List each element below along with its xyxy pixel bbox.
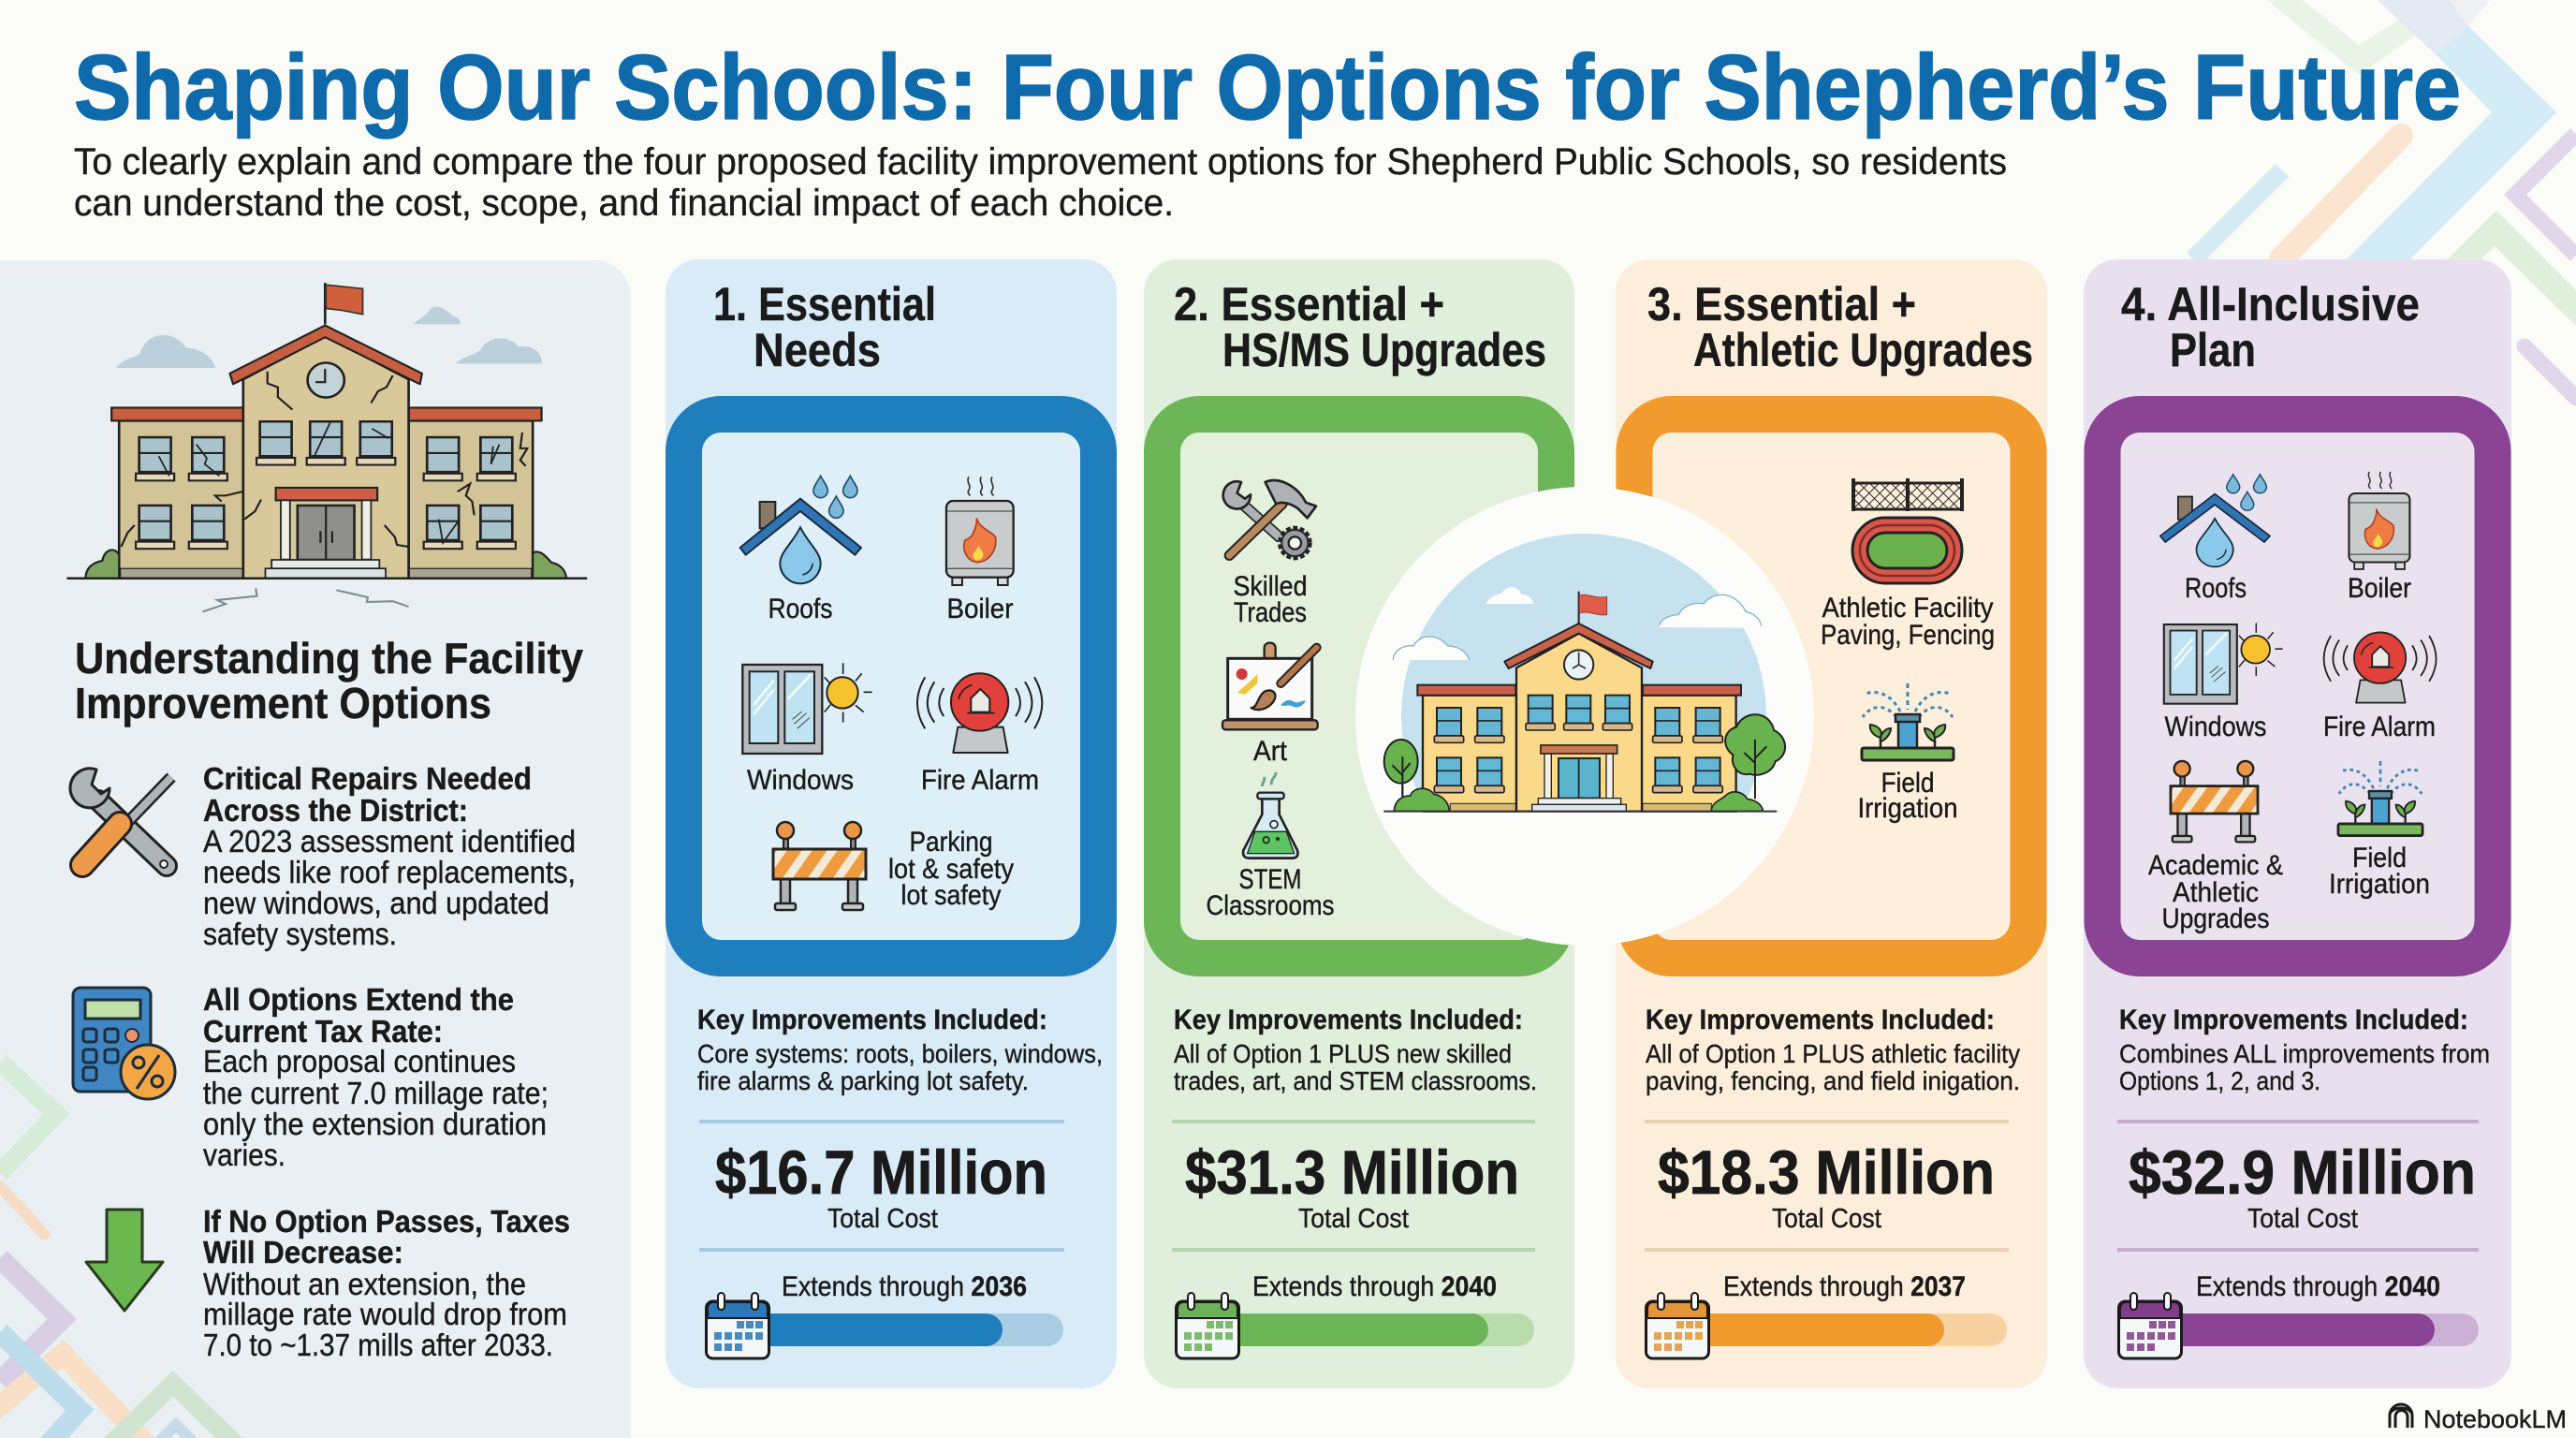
icon: green down arrow	[86, 1210, 163, 1311]
timeline: option 1 extends through 2036: Extends through 2036	[782, 1271, 1027, 1302]
cost: option 3: $18.3 Million	[1658, 1137, 1995, 1207]
frame: option 3 improvements	[1634, 414, 2028, 959]
timeline: option 4 extends through 2040: Extends through 2040	[2196, 1271, 2440, 1302]
heading: option 4: 4. All-Inclusive	[2121, 278, 2420, 330]
label: field irrigation: Field	[1881, 768, 1934, 799]
label: stem classrooms: STEM	[1239, 864, 1301, 895]
text: if no option passes	[203, 1204, 570, 1362]
label: academic and athletic upgrades	[2148, 850, 2283, 934]
cost: option 2: $31.3 Million	[1185, 1137, 1519, 1207]
heading: option 1	[713, 278, 936, 376]
label: athletic facility: Paving, Fencing	[1821, 620, 1995, 651]
label: boiler: Boiler	[947, 594, 1014, 624]
label: stem classrooms	[1206, 864, 1335, 921]
cost: option 3: Total Cost	[1772, 1204, 1881, 1234]
text: all options extend: the current 7.0 millage rate;	[203, 1076, 549, 1110]
text: key improvements option 3: Key Improvements Included:	[1646, 1005, 1995, 1035]
subtitle	[74, 141, 2007, 224]
timeline: option 2 extends through 2040: Extends through 2040	[1252, 1271, 1497, 1302]
text: all options extend: Current Tax Rate:	[203, 1014, 443, 1049]
label: stem classrooms: Classrooms	[1206, 890, 1335, 921]
illustration: damaged school	[66, 283, 587, 612]
text: critical repairs: Across the District:	[203, 793, 468, 828]
text: key improvements option 3: All of Option 1 PLUS athletic facility	[1646, 1039, 2020, 1068]
subtitle: To clearly explain and compare the four proposed facility improvement options for Shepherd Public Schools, so residents	[74, 141, 2007, 183]
label: field irrigation	[1857, 768, 1958, 824]
label: field irrigation	[2329, 843, 2430, 900]
text: key improvements option 3	[1646, 1005, 2020, 1095]
text: key improvements option 2: trades, art, and STEM classrooms.	[1174, 1066, 1537, 1095]
text: key improvements option 2	[1174, 1005, 1537, 1095]
text: critical repairs: needs like roof replacements,	[203, 855, 576, 889]
text: critical repairs: safety systems.	[203, 917, 397, 951]
icon: windows	[2164, 624, 2283, 704]
cost: option 2: Total Cost	[1298, 1204, 1409, 1234]
text: if no option passes: Will Decrease:	[203, 1235, 403, 1269]
panel: option 2 essential + HS/MS upgrades	[1144, 259, 1574, 1388]
cost: option 2	[1185, 1137, 1519, 1234]
label: art: Art	[1253, 736, 1288, 767]
icon: fire alarm	[2324, 632, 2437, 703]
cost: option 4: $32.9 Million	[2129, 1137, 2476, 1207]
icon: fire alarm	[917, 673, 1042, 753]
label: academic and athletic upgrades: Upgrades	[2162, 903, 2269, 934]
panel: option 4 all-inclusive plan	[2084, 259, 2511, 1388]
cost: option 4: Total Cost	[2247, 1204, 2358, 1234]
text: critical repairs: new windows, and updated	[203, 886, 549, 920]
text: if no option passes: If No Option Passes, Taxes	[203, 1204, 570, 1239]
heading: option 2: 2. Essential +	[1174, 278, 1444, 330]
frame: option 2 improvements	[1163, 414, 1556, 959]
text: critical repairs: A 2023 assessment identified	[203, 824, 576, 858]
icon: calculator with percent badge	[73, 988, 175, 1099]
label: parking lot safety	[888, 827, 1014, 911]
frame: option 1 improvements	[683, 414, 1099, 959]
label: skilled trades	[1234, 571, 1307, 628]
heading: understanding the facility improvement options: Understanding the Facility	[75, 634, 583, 682]
cost: option 1: $16.7 Million	[715, 1137, 1047, 1207]
logo: NotebookLM: NotebookLM	[2423, 1405, 2567, 1433]
panel: option 1 essential needs	[666, 259, 1117, 1388]
text: key improvements option 3: paving, fencing, and field inigation.	[1646, 1066, 2020, 1095]
text: if no option passes: Without an extension, the	[203, 1267, 526, 1301]
cost: option 1: Total Cost	[827, 1204, 938, 1234]
label: athletic facility: Athletic Facility	[1822, 593, 1994, 624]
icon: windows	[742, 663, 872, 754]
text: all options extend: varies.	[203, 1137, 285, 1172]
heading: understanding the facility improvement options: Improvement Options	[75, 679, 491, 727]
title: Shaping Our Schools: Four Options for Shepherd’s Future	[74, 36, 2461, 139]
cost: option 3	[1658, 1137, 1995, 1234]
text: all options extend: Each proposal continues	[203, 1044, 516, 1078]
label: skilled trades: Trades	[1234, 597, 1307, 628]
text: key improvements option 2: All of Option 1 PLUS new skilled	[1174, 1039, 1512, 1068]
subtitle: can understand the cost, scope, and financial impact of each choice.	[74, 183, 1174, 224]
icon: roofs	[2160, 475, 2270, 566]
label: windows: Windows	[747, 765, 854, 796]
text: critical repairs	[203, 761, 576, 951]
text: key improvements option 1: Core systems: roots, boilers, windows,	[697, 1039, 1103, 1068]
icon: skilled trades	[1223, 480, 1316, 558]
cost: option 4	[2129, 1137, 2476, 1234]
heading: option 3	[1647, 278, 2033, 376]
heading: option 1: 1. Essential	[713, 278, 936, 330]
timeline: option 4 extends through 2040	[2119, 1271, 2479, 1358]
label: parking lot safety: lot safety	[900, 880, 1002, 911]
frame: option 4 improvements	[2102, 414, 2493, 959]
icon: wrench and screwdriver	[70, 769, 171, 868]
heading: option 2	[1174, 278, 1546, 376]
timeline: option 3 extends through 2037: Extends through 2037	[1723, 1271, 1966, 1302]
text: key improvements option 1: Key Improvements Included:	[697, 1005, 1047, 1035]
label: fire alarm: Fire Alarm	[2323, 712, 2436, 742]
label: roofs: Roofs	[768, 594, 833, 624]
icon: parking barrier	[773, 822, 866, 910]
label: athletic facility	[1821, 593, 1995, 651]
heading: option 4	[2121, 278, 2420, 376]
text: all options extend: All Options Extend the	[203, 982, 514, 1017]
icon: stem flask	[1243, 772, 1297, 858]
icon: boiler	[2349, 472, 2409, 569]
text: all options extend: only the extension duration	[203, 1107, 547, 1141]
heading: option 1: Needs	[754, 324, 881, 376]
text: key improvements option 4: Key Improvements Included:	[2119, 1005, 2468, 1035]
heading: option 4: Plan	[2170, 324, 2256, 376]
text: key improvements option 4	[2119, 1005, 2490, 1095]
label: academic and athletic upgrades: Athletic	[2173, 877, 2259, 908]
timeline: option 3 extends through 2037	[1646, 1271, 2007, 1358]
label: fire alarm: Fire Alarm	[921, 765, 1039, 796]
heading: understanding the facility improvement options	[75, 634, 583, 727]
icon: roofs	[740, 476, 861, 583]
icon: boiler	[946, 477, 1014, 585]
text: critical repairs: Critical Repairs Needed	[203, 761, 532, 796]
left panel: understanding the options	[0, 260, 631, 1438]
text: if no option passes: 7.0 to ~1.37 mills after 2033.	[203, 1328, 553, 1362]
label: academic and athletic upgrades: Academic &	[2148, 850, 2283, 881]
label: skilled trades: Skilled	[1234, 571, 1307, 602]
icon: art	[1222, 643, 1318, 729]
heading: option 2: HS/MS Upgrades	[1222, 324, 1546, 376]
label: roofs: Roofs	[2185, 573, 2247, 604]
label: field irrigation: Field	[2352, 843, 2407, 873]
top-right geometric background	[2193, 0, 2576, 398]
text: key improvements option 1: fire alarms & parking lot safety.	[697, 1066, 1029, 1095]
panel: option 3 essential + athletic upgrades	[1616, 259, 2047, 1388]
label: parking lot safety: lot & safety	[888, 854, 1014, 885]
center illustration: new school in circle	[1355, 487, 1814, 946]
label: field irrigation: Irrigation	[1857, 793, 1958, 824]
text: if no option passes: millage rate would drop from	[203, 1297, 567, 1331]
icon: athletic fence and track	[1852, 478, 1962, 583]
icon: field irrigation	[2338, 761, 2422, 836]
icon: barrier	[2171, 761, 2258, 842]
timeline: option 2 extends through 2040	[1176, 1271, 1534, 1358]
label: boiler: Boiler	[2348, 573, 2411, 604]
text: key improvements option 1	[697, 1005, 1103, 1095]
label: field irrigation: Irrigation	[2329, 869, 2430, 900]
icon: field irrigation	[1862, 683, 1954, 760]
label: parking lot safety: Parking	[910, 827, 992, 858]
cost: option 1	[715, 1137, 1047, 1234]
text: key improvements option 4: Combines ALL improvements from	[2119, 1039, 2490, 1068]
timeline: option 1 extends through 2036	[706, 1271, 1063, 1358]
label: windows: Windows	[2164, 712, 2267, 742]
heading: option 3: Athletic Upgrades	[1693, 324, 2033, 376]
text: key improvements option 2: Key Improvements Included:	[1174, 1005, 1523, 1035]
heading: option 3: 3. Essential +	[1647, 278, 1916, 330]
bottom-left geometric background	[0, 1062, 239, 1438]
text: key improvements option 4: Options 1, 2, and 3.	[2119, 1066, 2320, 1095]
text: all options extend	[203, 982, 549, 1172]
